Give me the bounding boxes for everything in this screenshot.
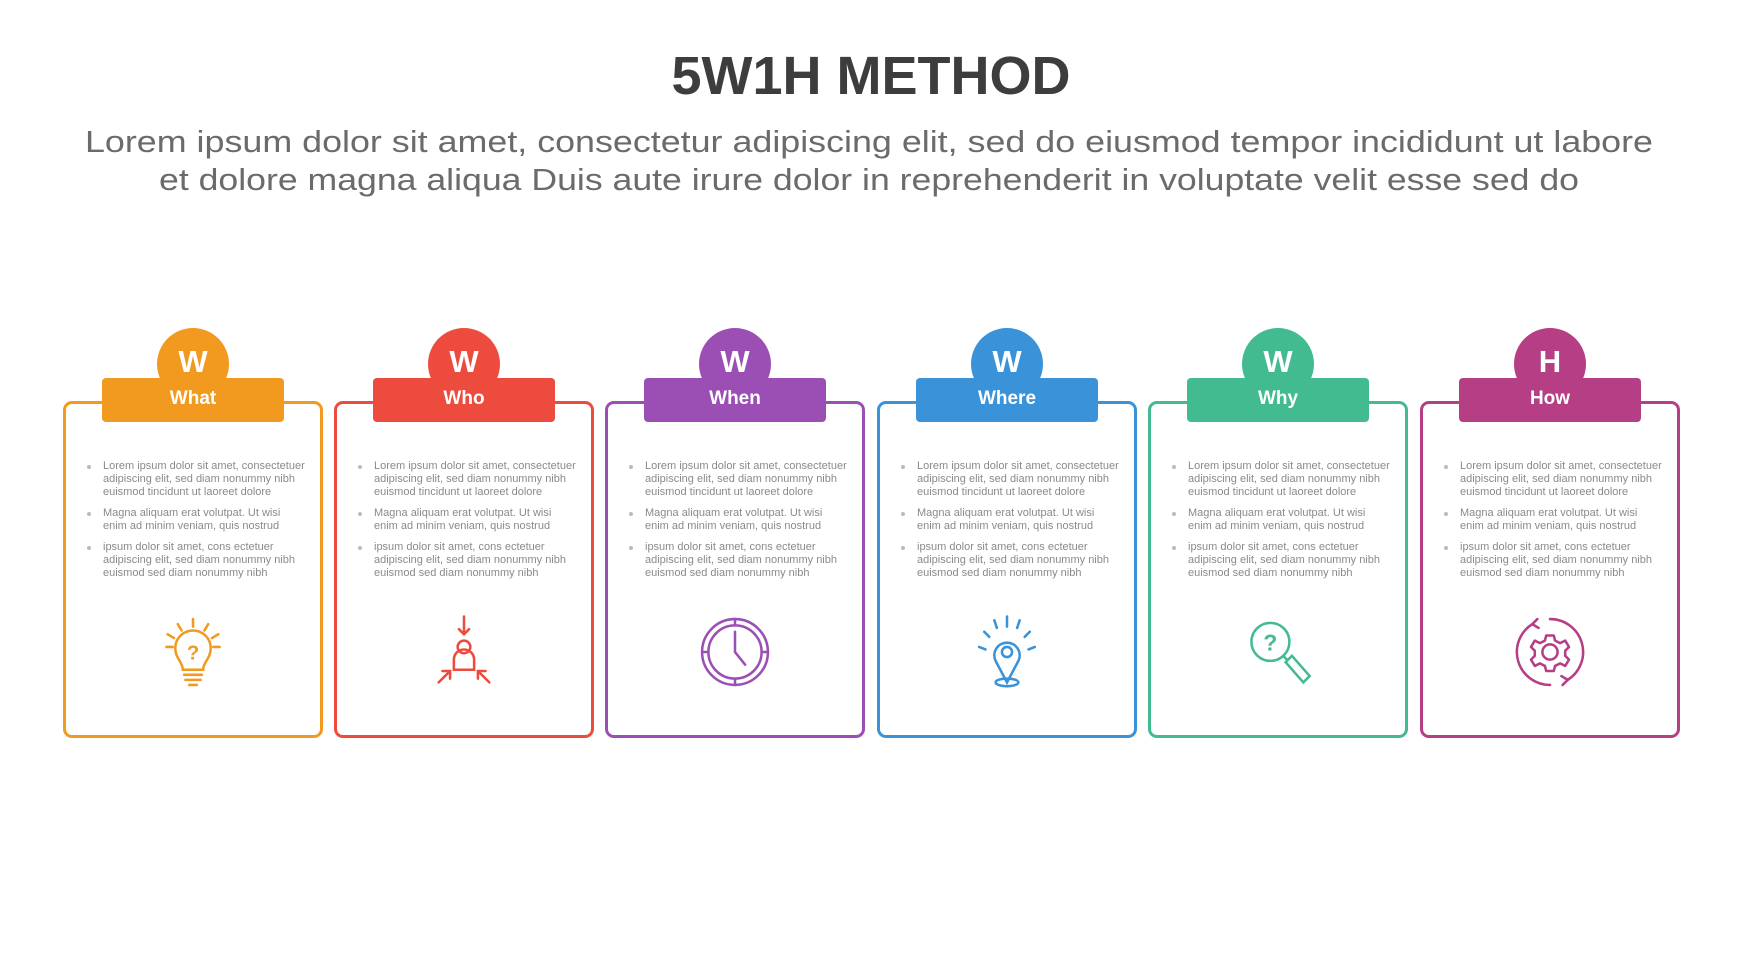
text: ipsum dolor sit amet, cons ectetuer: [1188, 541, 1359, 553]
text: W: [1263, 344, 1293, 379]
text: When: [709, 388, 761, 409]
text: enim ad minim veniam, quis nostrud: [1460, 520, 1636, 532]
text: adipiscing elit, sed diam nonummy nibh: [374, 554, 566, 566]
text: Magna aliquam erat volutpat. Ut wisi: [103, 507, 280, 519]
text: adipiscing elit, sed diam nonummy nibh: [1460, 554, 1652, 566]
text: euismod tincidunt ut laoreet dolore: [645, 486, 813, 498]
subtitle: Lorem ipsum dolor sit amet, consectetur adipiscing elit, sed do eiusmod tempor incididunt ut labore: [85, 124, 1653, 159]
text: enim ad minim veniam, quis nostrud: [374, 520, 550, 532]
text: adipiscing elit, sed diam nonummy nibh: [103, 554, 295, 566]
panel: who: [334, 328, 594, 738]
text: Lorem ipsum dolor sit amet, consectetuer: [374, 460, 576, 472]
panel: why: [1148, 328, 1408, 738]
text: Magna aliquam erat volutpat. Ut wisi: [1188, 507, 1365, 519]
text: ipsum dolor sit amet, cons ectetuer: [645, 541, 816, 553]
text: euismod sed diam nonummy nibh: [374, 567, 538, 579]
text: W: [178, 344, 208, 379]
text: enim ad minim veniam, quis nostrud: [103, 520, 279, 532]
text: Where: [978, 388, 1036, 409]
panel: when: [605, 328, 865, 738]
text: euismod sed diam nonummy nibh: [645, 567, 809, 579]
text: adipiscing elit, sed diam nonummy nibh: [1188, 554, 1380, 566]
text: Why: [1258, 388, 1298, 409]
text: H: [1539, 344, 1561, 379]
text: euismod tincidunt ut laoreet dolore: [103, 486, 271, 498]
text: enim ad minim veniam, quis nostrud: [645, 520, 821, 532]
text: adipiscing elit, sed diam nonummy nibh: [917, 473, 1109, 485]
text: adipiscing elit, sed diam nonummy nibh: [645, 554, 837, 566]
text: Magna aliquam erat volutpat. Ut wisi: [1460, 507, 1637, 519]
text: ipsum dolor sit amet, cons ectetuer: [103, 541, 274, 553]
text: euismod sed diam nonummy nibh: [917, 567, 1081, 579]
panel: what: [63, 328, 323, 738]
text: adipiscing elit, sed diam nonummy nibh: [374, 473, 566, 485]
text: W: [449, 344, 479, 379]
text: Magna aliquam erat volutpat. Ut wisi: [645, 507, 822, 519]
subtitle: [85, 124, 1653, 197]
panel: how: [1420, 328, 1680, 738]
text: euismod sed diam nonummy nibh: [103, 567, 267, 579]
text: euismod tincidunt ut laoreet dolore: [917, 486, 1085, 498]
text: euismod sed diam nonummy nibh: [1460, 567, 1624, 579]
text: Lorem ipsum dolor sit amet, consectetuer: [1460, 460, 1662, 472]
text: Who: [443, 388, 485, 409]
text: Lorem ipsum dolor sit amet, consectetuer: [1188, 460, 1390, 472]
title: 5W1H METHOD: [671, 46, 1070, 106]
text: Lorem ipsum dolor sit amet, consectetuer: [917, 460, 1119, 472]
panel: where: [877, 328, 1137, 738]
text: euismod tincidunt ut laoreet dolore: [1188, 486, 1356, 498]
text: euismod tincidunt ut laoreet dolore: [374, 486, 542, 498]
text: How: [1530, 388, 1570, 409]
text: euismod sed diam nonummy nibh: [1188, 567, 1352, 579]
text: adipiscing elit, sed diam nonummy nibh: [917, 554, 1109, 566]
text: ?: [187, 643, 199, 665]
text: enim ad minim veniam, quis nostrud: [917, 520, 1093, 532]
text: W: [992, 344, 1022, 379]
text: enim ad minim veniam, quis nostrud: [1188, 520, 1364, 532]
subtitle: et dolore magna aliqua Duis aute irure dolor in reprehenderit in voluptate velit esse sed do: [159, 162, 1579, 197]
text: adipiscing elit, sed diam nonummy nibh: [1460, 473, 1652, 485]
text: ?: [1263, 630, 1277, 656]
text: ipsum dolor sit amet, cons ectetuer: [1460, 541, 1631, 553]
text: Lorem ipsum dolor sit amet, consectetuer: [645, 460, 847, 472]
text: Magna aliquam erat volutpat. Ut wisi: [374, 507, 551, 519]
text: adipiscing elit, sed diam nonummy nibh: [645, 473, 837, 485]
text: Magna aliquam erat volutpat. Ut wisi: [917, 507, 1094, 519]
text: adipiscing elit, sed diam nonummy nibh: [1188, 473, 1380, 485]
text: euismod tincidunt ut laoreet dolore: [1460, 486, 1628, 498]
text: ipsum dolor sit amet, cons ectetuer: [917, 541, 1088, 553]
text: What: [170, 388, 216, 409]
text: W: [720, 344, 750, 379]
text: Lorem ipsum dolor sit amet, consectetuer: [103, 460, 305, 472]
text: ipsum dolor sit amet, cons ectetuer: [374, 541, 545, 553]
text: adipiscing elit, sed diam nonummy nibh: [103, 473, 295, 485]
